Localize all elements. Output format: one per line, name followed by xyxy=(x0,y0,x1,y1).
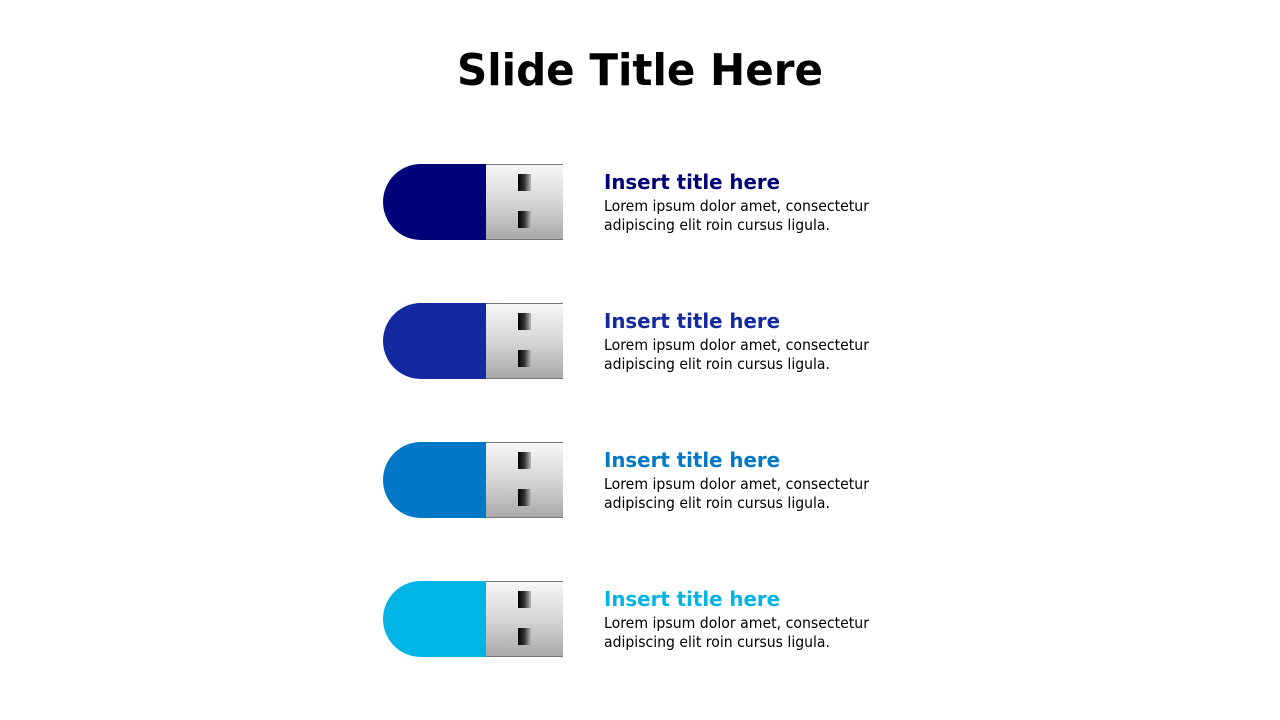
text block 4: Insert title here xyxy=(604,587,780,611)
title: Slide Title Here xyxy=(457,45,823,96)
text block 1: adipiscing elit roin cursus ligula. xyxy=(604,216,830,234)
icon: usb drive 2 xyxy=(383,303,563,379)
text block 4: adipiscing elit roin cursus ligula. xyxy=(604,633,830,651)
text block 1: Lorem ipsum dolor amet, consectetur xyxy=(604,197,870,215)
text block 3: Insert title here xyxy=(604,448,780,472)
text block 3 xyxy=(604,448,870,512)
text block 4 xyxy=(604,587,870,651)
item 3 xyxy=(383,442,870,518)
text block 2: adipiscing elit roin cursus ligula. xyxy=(604,355,830,373)
icon: usb drive 3 xyxy=(383,442,563,518)
item 2 xyxy=(383,303,870,379)
text block 3: Lorem ipsum dolor amet, consectetur xyxy=(604,475,870,493)
icon: usb drive 1 xyxy=(383,164,563,240)
item 4 xyxy=(383,581,870,657)
text block 3: adipiscing elit roin cursus ligula. xyxy=(604,494,830,512)
text block 4: Lorem ipsum dolor amet, consectetur xyxy=(604,614,870,632)
text block 2 xyxy=(604,309,870,373)
text block 1: Insert title here xyxy=(604,170,780,194)
text block 1 xyxy=(604,170,870,234)
item 1 xyxy=(383,164,870,240)
text block 2: Lorem ipsum dolor amet, consectetur xyxy=(604,336,870,354)
text block 2: Insert title here xyxy=(604,309,780,333)
icon: usb drive 4 xyxy=(383,581,563,657)
